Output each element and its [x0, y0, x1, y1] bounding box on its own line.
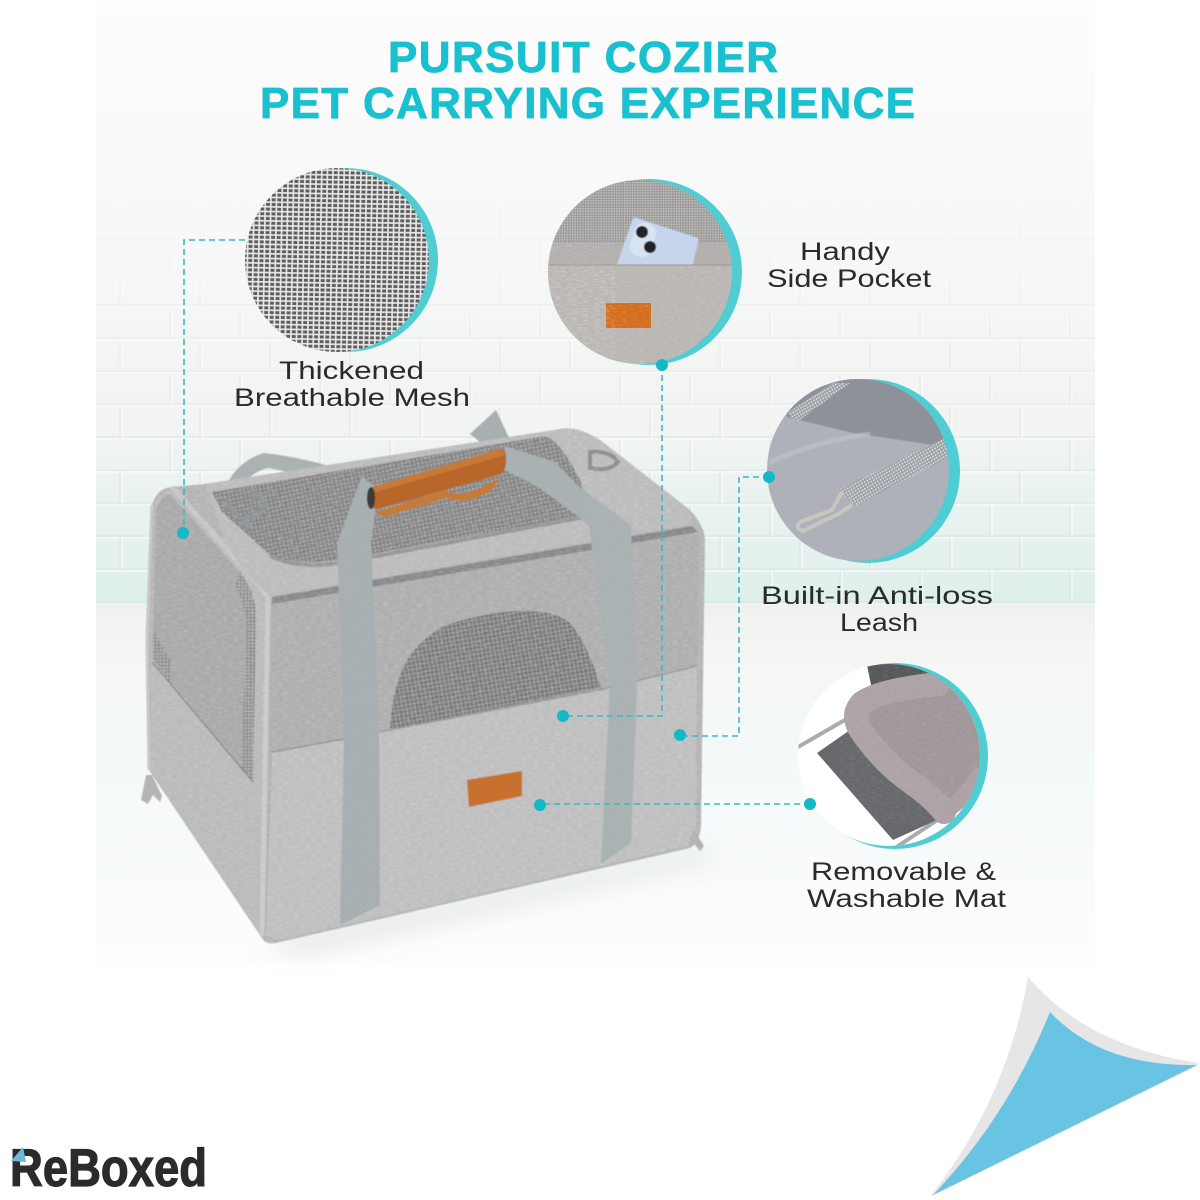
top lid band	[205, 428, 692, 596]
leather handle	[367, 449, 506, 517]
teal circle backing	[776, 379, 960, 563]
label: Leash	[840, 609, 918, 637]
bag body base	[147, 428, 705, 943]
background: brick wall and floor panel	[96, 182, 1095, 830]
label	[807, 858, 1006, 913]
zipper pull left	[141, 775, 162, 804]
bag floor shadow	[262, 848, 720, 955]
label: Removable &	[811, 858, 996, 886]
title	[260, 33, 915, 128]
callout: removable and washable mat	[790, 660, 1006, 913]
title: PURSUIT COZIER	[388, 33, 778, 82]
zipper pull right	[689, 830, 704, 851]
connector: pocket callout to front pocket	[557, 359, 668, 722]
connector: leash callout to bag	[674, 471, 775, 741]
folded corner graphic	[930, 977, 1198, 1197]
lower pocket panel	[266, 666, 697, 940]
top zipper band	[272, 526, 698, 604]
teal circle backing	[556, 179, 742, 365]
lid mesh panel	[212, 436, 590, 562]
ReBoxed logo: ReBoxed	[10, 1139, 207, 1198]
side mesh	[152, 494, 256, 782]
leash strap	[838, 438, 950, 506]
logo corner fold	[11, 1147, 26, 1162]
label: Built-in Anti-loss	[761, 582, 993, 610]
back buckle	[590, 452, 618, 469]
metal clasp	[798, 492, 852, 531]
label: Breathable Mesh	[234, 384, 470, 412]
mat detail photo	[798, 664, 980, 846]
label	[234, 357, 470, 412]
label	[761, 582, 993, 637]
leash detail photo	[767, 379, 949, 561]
back strap loop	[470, 410, 560, 480]
callout: thickened breathable mesh	[234, 165, 470, 412]
carrier bag illustration	[140, 410, 720, 955]
label: Thickened	[279, 357, 424, 385]
orange brand tag	[467, 771, 522, 807]
callout: handy side pocket	[545, 175, 931, 371]
mesh detail photo	[245, 168, 429, 352]
connector: mat callout to bag	[534, 798, 816, 811]
teal circle backing	[254, 168, 438, 352]
fabric texture	[140, 420, 710, 950]
left strap loop	[228, 453, 368, 498]
connector: mesh callout to side of bag	[177, 240, 245, 539]
callout: built-in anti-loss leash	[760, 375, 993, 637]
title: PET CARRYING EXPERIENCE	[260, 79, 915, 128]
teal circle backing	[802, 663, 988, 849]
pocket detail photo	[548, 180, 732, 364]
side panel	[147, 487, 268, 936]
label: Side Pocket	[767, 265, 931, 293]
label: Washable Mat	[807, 885, 1006, 913]
phone	[619, 220, 696, 266]
label: Handy	[800, 238, 891, 266]
left carry strap	[337, 476, 380, 925]
front face	[266, 529, 699, 940]
right carry strap	[505, 446, 637, 864]
front mesh window	[390, 611, 601, 729]
side buckle	[222, 490, 264, 528]
label	[767, 238, 931, 293]
